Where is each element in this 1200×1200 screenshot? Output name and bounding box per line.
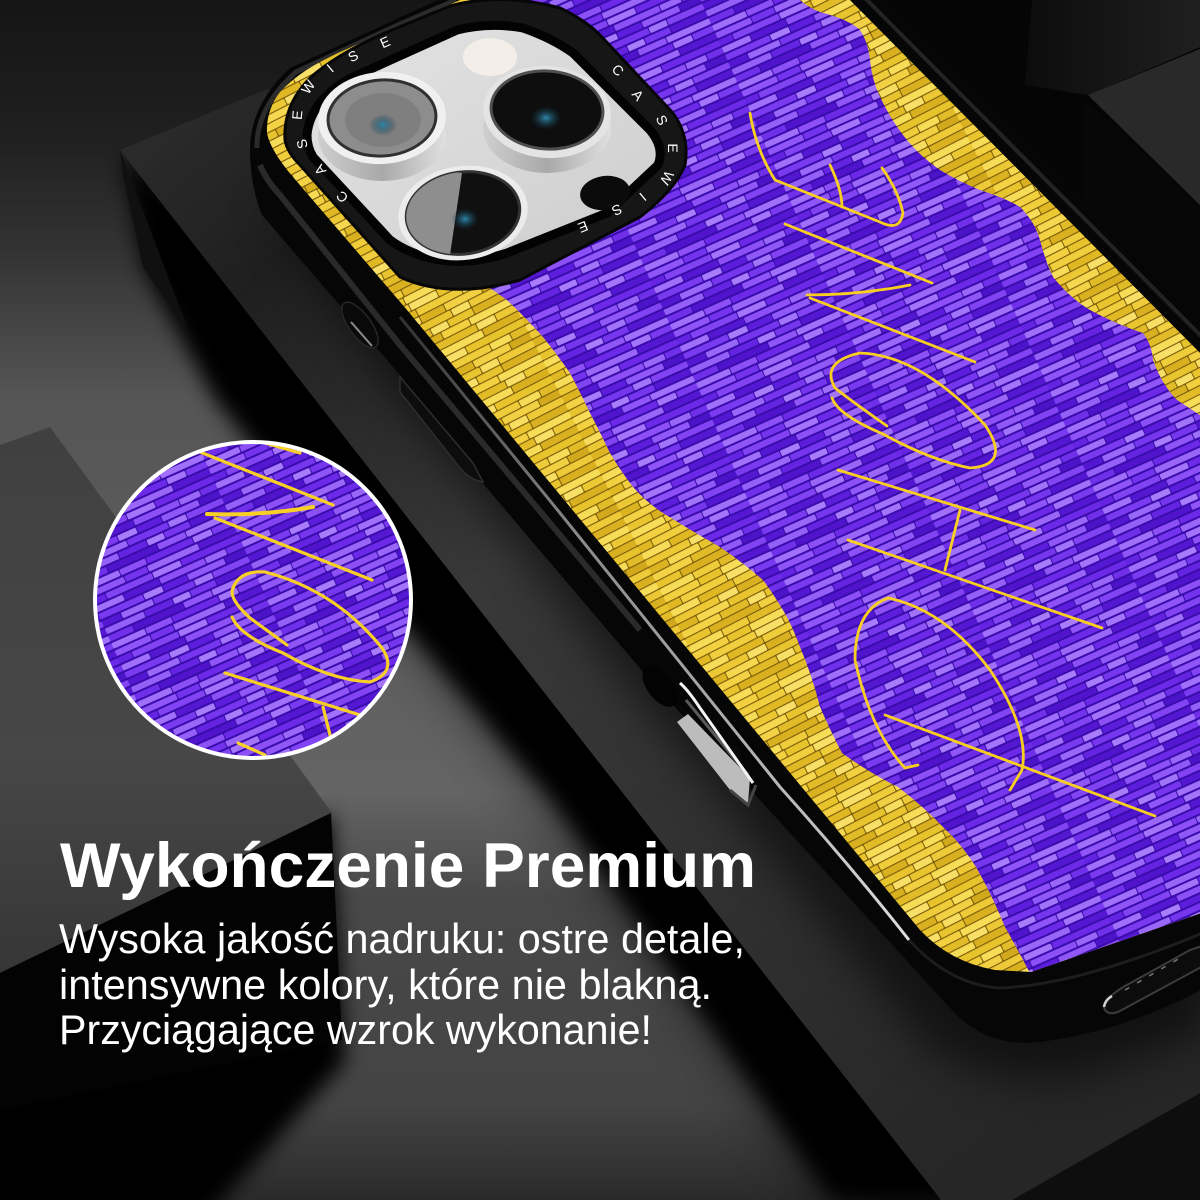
magnified lettering	[200, 443, 388, 755]
description text	[59, 915, 745, 1053]
CASEWISE ring text: W	[298, 76, 319, 97]
CASEWISE ring text: S	[653, 112, 671, 128]
CASEWISE ring text: E	[377, 33, 393, 51]
charging port	[1104, 945, 1200, 1013]
CASEWISE ring text: E	[576, 218, 590, 236]
side button silver	[635, 659, 756, 805]
handwritten PHONE lettering	[750, 113, 1155, 816]
side button upper	[400, 377, 483, 482]
silver edge highlight	[400, 317, 909, 940]
CASEWISE ring text: S	[609, 201, 625, 219]
description text: Wysoka jakość nadruku: ostre detale,	[59, 915, 745, 962]
mute switch	[335, 297, 385, 353]
wavy purple band	[490, 0, 1200, 1000]
lens top right	[480, 62, 614, 173]
flash	[463, 38, 517, 76]
case rim	[257, 0, 456, 148]
CASEWISE ring text: I	[636, 190, 650, 204]
CASEWISE ring text: E	[665, 143, 681, 153]
lens bottom	[398, 166, 528, 260]
CASEWISE ring text: C	[333, 188, 351, 206]
CASEWISE ring text: S	[345, 47, 361, 65]
heading: Wykończenie Premium	[60, 831, 756, 901]
description text: Przyciągające wzrok wykonanie!	[59, 1006, 652, 1053]
microphone hole	[578, 173, 632, 213]
CASEWISE ring text: A	[310, 161, 329, 178]
phone shadow	[260, 200, 1200, 1079]
printed back design	[266, 0, 1200, 972]
CASEWISE ring text: I	[323, 61, 337, 75]
description text: intensywne kolory, które nie blakną.	[59, 961, 712, 1008]
camera island	[285, 0, 686, 289]
lens top left	[315, 68, 449, 181]
CASEWISE ring text	[289, 33, 681, 236]
CASEWISE ring text: W	[656, 168, 677, 188]
magnifier circle	[90, 440, 420, 760]
phone case body	[250, 0, 1200, 1043]
camera plate	[307, 25, 660, 261]
CASEWISE ring text: A	[629, 86, 648, 104]
CASEWISE ring text: E	[289, 110, 305, 120]
CASEWISE ring text: S	[293, 137, 311, 151]
CASEWISE ring text: C	[609, 61, 627, 79]
